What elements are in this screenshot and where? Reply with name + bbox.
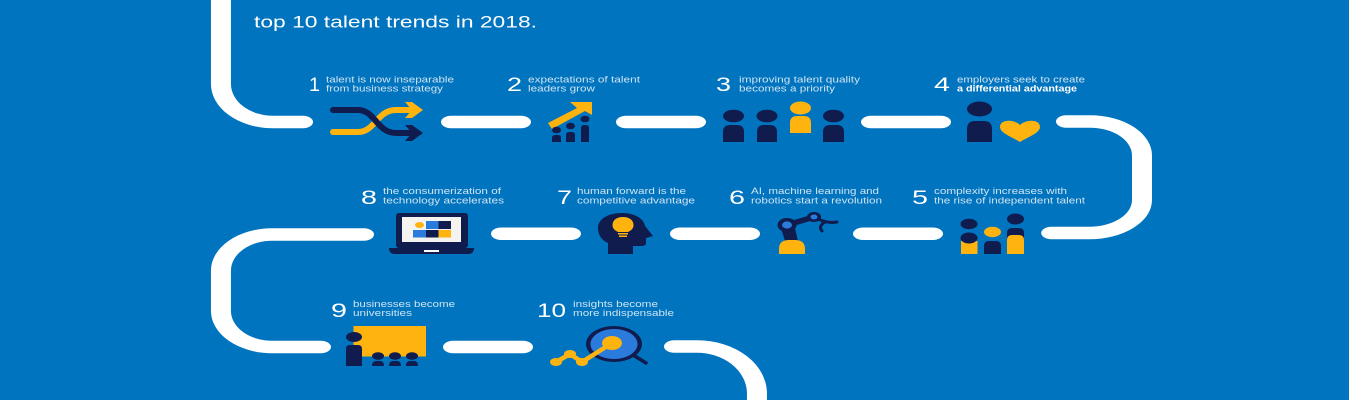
trend 4 (934, 74, 1085, 142)
icon: person with heart (967, 102, 1040, 142)
number 3: 3 (716, 74, 731, 96)
icon: head with light bulb (598, 213, 653, 254)
trend 6 text: AI, machine learning and (751, 186, 879, 196)
trend 1 text: from business strategy (326, 84, 443, 94)
trend 9 text (353, 299, 455, 318)
trend 7 text: human forward is the (577, 186, 686, 196)
trend 3 text: becomes a priority (739, 84, 836, 94)
number 4: 4 (934, 74, 950, 96)
trend 8 (361, 186, 505, 254)
trend 2 text: leaders grow (528, 84, 595, 94)
icon: presenter with audience (346, 326, 426, 366)
trend 1 text (326, 74, 454, 94)
icon: crossing arrows (333, 102, 423, 141)
trend 3 (716, 74, 861, 142)
trend 2 text (528, 74, 641, 94)
trend 6 text (751, 186, 882, 206)
trend 8 text (383, 186, 505, 206)
number 9: 9 (331, 300, 347, 322)
icon: rising arrow over people (548, 102, 592, 142)
icon: mixed group of people (960, 214, 1024, 254)
trend 5 text: the rise of independent talent (934, 196, 1086, 206)
trend 5 text (934, 186, 1086, 206)
trend 3 text (739, 74, 861, 94)
number 6: 6 (729, 187, 745, 209)
title: top 10 talent trends in 2018. (254, 14, 537, 32)
trend 9 (331, 299, 455, 366)
trend 8 text: the consumerization of (383, 186, 502, 196)
trend 10 text: insights become (573, 299, 658, 309)
icon: robot arm (778, 212, 837, 254)
number 1: 1 (309, 74, 320, 96)
trend 9 text: businesses become (353, 299, 455, 309)
number 8: 8 (361, 187, 377, 209)
icon: row of people with one highlighted (723, 102, 844, 142)
trend 4 text (957, 74, 1085, 94)
trend 6 text: robotics start a revolution (751, 196, 882, 206)
number 10: 10 (537, 300, 566, 322)
trend 1 text: talent is now inseparable (326, 74, 454, 84)
trend 3 text: improving talent quality (739, 74, 861, 84)
trend 9 text: universities (353, 308, 413, 318)
winding path (221, 0, 1142, 400)
trend 4 text: employers seek to create (957, 74, 1085, 84)
trend 4 text: a differential advantage (957, 84, 1077, 94)
trend 2 (507, 74, 641, 142)
trend 7 text: competitive advantage (577, 196, 695, 206)
trend 10 text: more indispensable (573, 308, 674, 318)
trend 5 text: complexity increases with (934, 186, 1067, 196)
trend 8 text: technology accelerates (383, 196, 505, 206)
trend 6 (729, 186, 882, 254)
trend 7 text (577, 186, 695, 206)
trend 1 (309, 74, 454, 141)
trend 7 (557, 186, 695, 254)
icon: magnifier over trend line (550, 326, 646, 366)
trend 2 text: expectations of talent (528, 74, 641, 84)
number 5: 5 (912, 187, 928, 209)
trend 10 text (573, 299, 674, 318)
number 7: 7 (557, 187, 572, 209)
icon: laptop (389, 213, 474, 254)
trend 10 (537, 299, 674, 366)
trend 5 (912, 186, 1086, 254)
number 2: 2 (507, 74, 522, 96)
